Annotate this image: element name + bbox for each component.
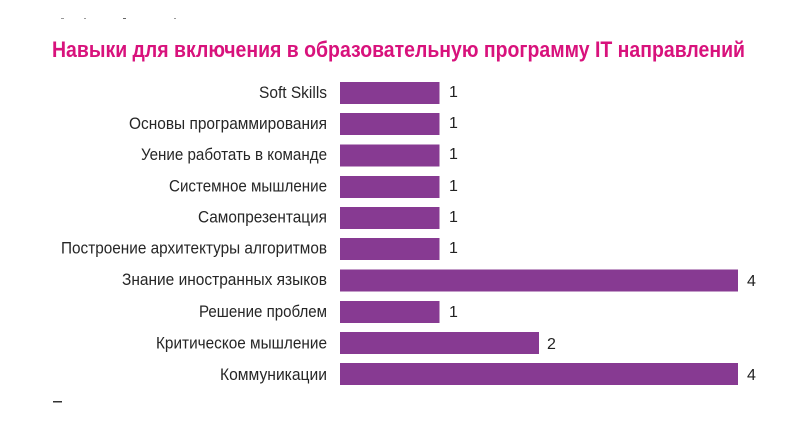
row: Критическое мышление: Критическое мышление	[156, 334, 327, 352]
top text remnants	[61, 18, 176, 19]
row: Самопрезентация: Самопрезентация	[198, 208, 327, 226]
row: Самопрезентация	[198, 207, 458, 229]
row: Системное мышление: Системное мышление	[169, 178, 327, 196]
row: Soft Skills: 1	[449, 84, 458, 101]
row: Построение архитектуры алгоритмов	[61, 238, 458, 260]
row: Критическое мышление: 2	[547, 336, 556, 353]
row: Системное мышление: 1	[449, 178, 458, 195]
row: Системное мышление	[169, 176, 458, 198]
row: Построение архитектуры алгоритмов: 1	[449, 240, 458, 257]
row: Soft Skills	[259, 82, 458, 104]
row: Знание иностранных языков: Знание иностранных языков	[122, 271, 327, 289]
row: Основы программирования	[129, 113, 458, 135]
row: Уение работать в команде: 1	[449, 146, 458, 163]
footer dash	[53, 401, 62, 402]
row: Решение проблем: Решение проблем	[199, 303, 327, 321]
row: Коммуникации	[220, 363, 756, 385]
row: Построение архитектуры алгоритмов: Построение архитектуры алгоритмов	[61, 240, 327, 258]
row: Знание иностранных языков: 4	[747, 273, 756, 290]
row: Основы программирования: Основы программирования	[129, 115, 327, 133]
row: Решение проблем: 1	[449, 304, 458, 321]
row: Самопрезентация: 1	[449, 209, 458, 226]
row: Коммуникации: 4	[747, 367, 756, 384]
row: Коммуникации: Коммуникации	[220, 366, 327, 384]
row: Критическое мышление	[156, 332, 556, 354]
bar chart	[61, 82, 756, 385]
row: Решение проблем	[199, 301, 458, 323]
row: Уение работать в команде: Уение работать в команде	[141, 146, 327, 164]
row: Основы программирования: 1	[449, 115, 458, 132]
row: Soft Skills: Soft Skills	[259, 84, 327, 102]
row: Знание иностранных языков	[122, 270, 756, 292]
row: Уение работать в команде	[141, 144, 458, 166]
